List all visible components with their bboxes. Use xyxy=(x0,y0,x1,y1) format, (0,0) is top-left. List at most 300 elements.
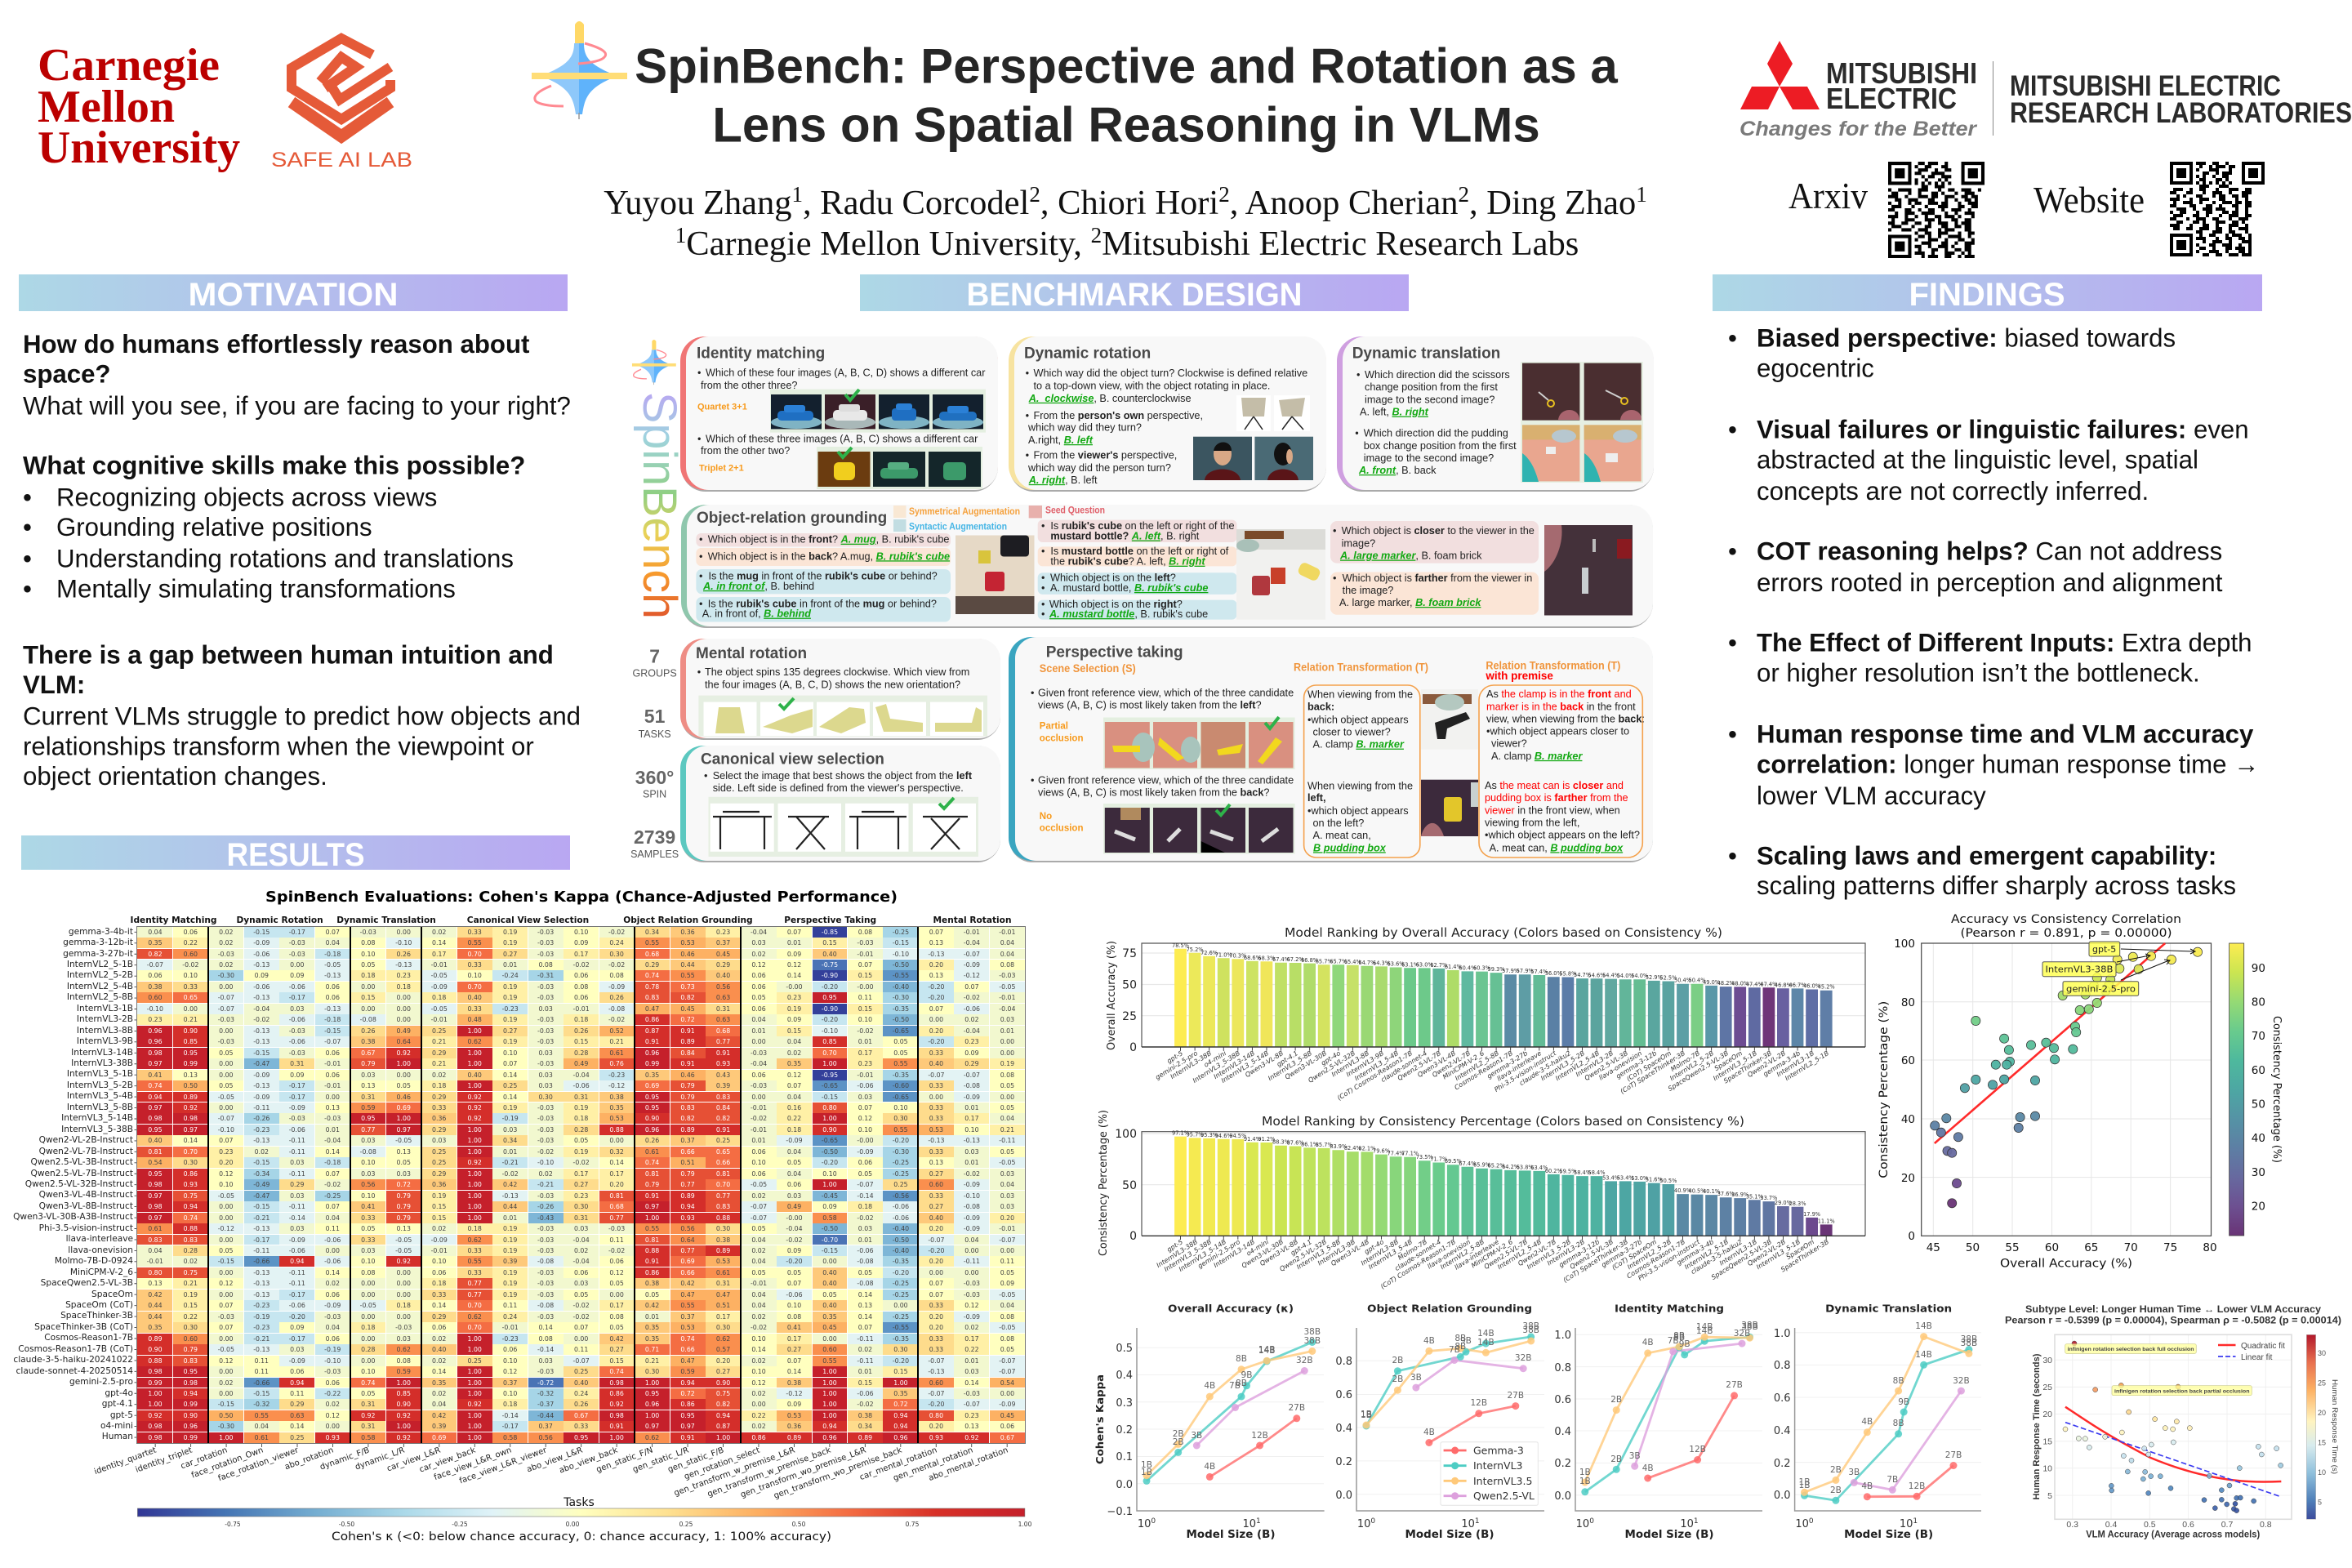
bar chart: model ranking by overall accuracy: Qwen3-VL-30B xyxy=(1284,1049,1328,1081)
panel: perspective taking: occlusion xyxy=(1040,823,1083,833)
heatmap: Cohen's kappa by model and task: 0.07 xyxy=(219,1137,234,1144)
heatmap: Cohen's kappa by model and task: 0.14 xyxy=(432,939,446,947)
heatmap: Cohen's kappa by model and task: -0.02 xyxy=(253,1016,270,1023)
heatmap: Cohen's kappa by model and task: -0.30 xyxy=(218,972,234,979)
authors and affiliations: 1 xyxy=(675,223,686,247)
heatmap: Cohen's kappa by model and task: 0.01 xyxy=(964,1159,979,1166)
heatmap: Cohen's kappa by model and task: 0.59 xyxy=(680,1368,695,1375)
heatmap: Cohen's kappa by model and task: 0.13 xyxy=(964,1423,979,1430)
heatmap: Cohen's kappa by model and task: 0.00 xyxy=(1000,1093,1014,1101)
heatmap: Cohen's kappa by model and task: 1.00 xyxy=(467,1390,482,1397)
heatmap: Cohen's kappa by model and task: -0.06 xyxy=(289,1038,305,1045)
panel: object-relation grounding: A. large marker, B. foam brick xyxy=(1339,550,1482,562)
vertical SpinBench wordmark: SpinBench xyxy=(633,392,686,619)
heatmap row labels: llava-onevision xyxy=(68,1245,133,1255)
bar chart: model ranking by overall accuracy: InternVL2_5-1B xyxy=(1784,1049,1830,1082)
panel: dynamic rotation: A.right, B. left xyxy=(1028,434,1094,446)
annotations: hardest subtypes: infinigen rotation selection back partial occlusion xyxy=(2114,1388,2249,1394)
bar chart: model ranking by overall accuracy: 49.0% xyxy=(1703,979,1720,986)
heatmap: Cohen's kappa by model and task: -0.02 xyxy=(608,929,625,936)
heatmap row labels: Human xyxy=(102,1432,133,1441)
heatmap: Cohen's kappa by model and task: -0.03 xyxy=(537,1038,554,1045)
heatmap: Cohen's kappa by model and task: -0.65 xyxy=(893,1093,909,1101)
bar chart: model ranking by consistency percentage: 94.5% xyxy=(1229,1133,1246,1139)
panel: object-relation grounding: A. large marker, B. foam brick xyxy=(1339,597,1481,608)
line chart: object relation grounding: 38B xyxy=(1522,1321,1539,1331)
heatmap: Cohen's kappa by model and task: 0.20 xyxy=(929,1258,943,1265)
heatmap: Cohen's kappa by model and task: -0.35 xyxy=(893,1071,909,1079)
heatmap: Cohen's kappa by model and task: -0.50 xyxy=(822,1148,838,1156)
heatmap: Cohen's kappa by model and task: -0.05 xyxy=(395,1137,412,1144)
heatmap: Cohen's kappa by model and task: 0.11 xyxy=(503,1302,517,1309)
heatmap: Cohen's kappa by model and task: 0.47 xyxy=(680,1291,695,1298)
heatmap: Cohen's kappa by model and task: -0.11 xyxy=(964,1258,980,1265)
heatmap: Cohen's kappa by model and task: 0.07 xyxy=(787,1082,801,1089)
authors and affiliations: 1 xyxy=(1636,182,1647,207)
line chart: dynamic translation: 38B xyxy=(1961,1339,1977,1348)
bar chart: model ranking by overall accuracy: gpt-5 xyxy=(1165,1049,1184,1065)
heatmap: Cohen's kappa by model and task: 0.95 xyxy=(680,1412,695,1419)
heatmap: Cohen's kappa by model and task: -0.00 xyxy=(857,1137,874,1144)
callout box: relation transformation with premise: marker is in the back in the front xyxy=(1486,701,1636,712)
heatmap: Cohen's kappa by model and task: -0.17 xyxy=(253,1236,270,1243)
heatmap colorbar: -0.25 xyxy=(452,1521,468,1528)
heatmap: Cohen's kappa by model and task: 0.22 xyxy=(787,1115,801,1122)
heatmap: Cohen's kappa by model and task: 0.00 xyxy=(751,1038,766,1045)
heatmap: Cohen's kappa by model and task: -0.32 xyxy=(253,1401,270,1408)
heatmap: Cohen's kappa by model and task: 0.03 xyxy=(964,1368,979,1375)
bar chart: model ranking by consistency percentage: InternVL3_5-4B xyxy=(1367,1238,1414,1271)
heatmap: Cohen's kappa by model and task: -0.20 xyxy=(928,1038,945,1045)
heatmap: Cohen's kappa by model and task: 0.24 xyxy=(609,939,624,947)
panel: dynamic translation xyxy=(1337,336,1654,492)
heatmap: Cohen's kappa by model and task: 0.10 xyxy=(787,1302,801,1309)
heatmap: Cohen's kappa by model and task: -0.09 xyxy=(857,1148,874,1156)
heatmap: Cohen's kappa by model and task: 0.96 xyxy=(184,1423,198,1430)
heatmap: Cohen's kappa by model and task: 0.10 xyxy=(467,972,482,979)
text block: motivation: relationships transform when the viewpoint or xyxy=(23,732,534,761)
heatmap: Cohen's kappa by model and task: 0.92 xyxy=(467,1401,482,1408)
bar chart: model ranking by overall accuracy: 68.6% xyxy=(1244,955,1261,961)
callout box: relation transformation: •which object appears xyxy=(1307,714,1409,725)
heatmap: Cohen's kappa by model and task: 0.02 xyxy=(432,1335,446,1343)
panel: object-relation grounding: • xyxy=(699,534,702,546)
panel: dynamic rotation: • xyxy=(1026,368,1029,379)
heatmap row labels: InternVL3-38B xyxy=(71,1058,133,1068)
colorbar: response time: 5 xyxy=(2318,1498,2322,1506)
heatmap: Cohen's kappa by model and task: 0.10 xyxy=(503,1390,517,1397)
heatmap: Cohen's kappa by model and task: -0.05 xyxy=(218,1093,234,1101)
legend: augmentation types: Syntactic Augmentation xyxy=(909,523,1007,532)
heatmap task labels: abo_rotation xyxy=(283,1446,335,1472)
heatmap: Cohen's kappa by model and task: 0.06 xyxy=(609,1258,624,1265)
heatmap: Cohen's kappa by model and task: 0.10 xyxy=(893,1104,908,1111)
scatter plot: accuracy vs consistency: 0 xyxy=(1908,1230,1915,1243)
heatmap: Cohen's kappa by model and task: -0.17 xyxy=(289,1093,305,1101)
heatmap: Cohen's kappa by model and task: 0.89 xyxy=(680,1038,695,1045)
panel: identity matching: Triplet 2+1 xyxy=(699,463,744,473)
colorbar: consistency: 90 xyxy=(2252,962,2265,975)
line chart: overall accuracy: 4B xyxy=(1204,1381,1215,1391)
heatmap: Cohen's kappa by model and task: 1.00 xyxy=(467,1027,482,1035)
heatmap: Cohen's kappa by model and task: 0.98 xyxy=(148,1115,163,1122)
heatmap: Cohen's kappa by model and task: 0.01 xyxy=(858,1236,872,1243)
panel: perspective taking: • xyxy=(1031,687,1034,698)
icon: check mark xyxy=(779,698,794,709)
heatmap: Cohen's kappa by model and task: 0.65 xyxy=(184,994,198,1001)
line chart: dynamic translation: 0.0 xyxy=(1774,1490,1791,1502)
callout box: relation transformation: closer to viewer? xyxy=(1313,726,1391,737)
heatmap row labels: InternVL3_5-14B xyxy=(61,1113,133,1123)
bar chart: model ranking by overall accuracy: 70.3% xyxy=(1229,952,1246,959)
heatmap: Cohen's kappa by model and task: 0.95 xyxy=(645,1390,659,1397)
heatmap: Cohen's kappa by model and task: 0.04 xyxy=(326,1324,340,1331)
heatmap: Cohen's kappa by model and task: 0.07 xyxy=(574,1324,588,1331)
heatmap: Cohen's kappa by model and task: 0.55 xyxy=(680,972,695,979)
heatmap: Cohen's kappa by model and task: -0.14 xyxy=(289,1214,305,1222)
bar chart: model ranking by consistency percentage: (CoT) SpaceOm xyxy=(1610,1238,1658,1272)
line chart: dynamic translation: 14B xyxy=(1915,1350,1932,1360)
heatmap: Cohen's kappa by model and task: 0.19 xyxy=(503,1269,517,1276)
image strip: quartet cars xyxy=(770,390,986,433)
heatmap: Cohen's kappa by model and task: 0.10 xyxy=(574,929,588,936)
heatmap: Cohen's kappa by model and task: -0.04 xyxy=(751,1060,767,1067)
colorbar: consistency: 80 xyxy=(2252,996,2265,1009)
colorbar: response time: 10 xyxy=(2318,1468,2326,1477)
heatmap: Cohen's kappa by model and task: 0.95 xyxy=(822,994,837,1001)
heatmap: Cohen's kappa by model and task: 0.83 xyxy=(716,1093,730,1101)
heatmap: Cohen's kappa by model and task: 0.31 xyxy=(361,1093,375,1101)
heatmap: Cohen's kappa by model and task: 0.08 xyxy=(858,929,872,936)
heatmap: Cohen's kappa by model and task: -0.05 xyxy=(360,1302,376,1309)
text block: motivation: Mentally simulating transformations xyxy=(56,575,456,603)
heatmap: Cohen's kappa by model and task: 1.00 xyxy=(148,1401,163,1408)
heatmap: Cohen's kappa by model and task: 0.10 xyxy=(503,1357,517,1365)
heatmap: Cohen's kappa by model and task: 0.33 xyxy=(467,961,482,969)
heatmap: Cohen's kappa by model and task: 0.58 xyxy=(503,1434,517,1441)
heatmap: Cohen's kappa by model and task: 0.68 xyxy=(609,1203,624,1210)
bar chart: model ranking by overall accuracy: 57.4% xyxy=(1530,969,1548,975)
bar chart: model ranking by overall accuracy: 54.4% xyxy=(1602,972,1619,978)
icon: small spinning top xyxy=(632,340,676,385)
heatmap: Cohen's kappa by model and task: 0.96 xyxy=(148,1038,163,1045)
heatmap: Cohen's kappa by model and task: 0.62 xyxy=(467,1313,482,1321)
line chart: identity matching: 10 xyxy=(1576,1518,1589,1530)
heatmap row labels: Qwen2-VL-7B-Instruct xyxy=(39,1147,133,1156)
heatmap: Cohen's kappa by model and task: -0.06 xyxy=(289,983,305,991)
bar chart: model ranking by consistency percentage: Qwen2.5-VL-3B xyxy=(1569,1238,1615,1271)
heatmap: Cohen's kappa by model and task: 0.96 xyxy=(645,1126,659,1134)
heatmap: Cohen's kappa by model and task: 0.63 xyxy=(290,1412,304,1419)
heatmap: Cohen's kappa by model and task: -0.17 xyxy=(289,1082,305,1089)
heatmap: Cohen's kappa by model and task: 1.00 xyxy=(467,1082,482,1089)
heatmap: Cohen's kappa by model and task: 0.17 xyxy=(609,1302,624,1309)
bar chart: model ranking by consistency percentage: 83.9% xyxy=(1330,1143,1347,1150)
heatmap: Cohen's kappa by model and task: -0.03 xyxy=(537,1027,554,1035)
heatmap: Cohen's kappa by model and task: -0.21 xyxy=(253,1335,270,1343)
heatmap: Cohen's kappa by model and task: -0.13 xyxy=(253,1291,270,1298)
heatmap: Cohen's kappa by model and task: 0.30 xyxy=(184,1324,198,1331)
heatmap: Cohen's kappa by model and task: 0.55 xyxy=(467,1258,482,1265)
heatmap: Cohen's kappa by model and task: 0.85 xyxy=(184,1038,198,1045)
heatmap: Cohen's kappa by model and task: 0.94 xyxy=(148,1093,163,1101)
heatmap: Cohen's kappa by model and task: 0.00 xyxy=(219,1269,234,1276)
heatmap: Cohen's kappa by model and task: 0.25 xyxy=(893,1181,908,1188)
heatmap: Cohen's kappa by model and task: 0.20 xyxy=(716,1357,730,1365)
heatmap row labels: InternVL3_5-2B xyxy=(67,1080,133,1090)
heatmap: Cohen's kappa by model and task: 0.83 xyxy=(184,1236,198,1243)
heatmap: Cohen's kappa by model and task: 0.70 xyxy=(467,1324,482,1331)
heatmap: Cohen's kappa by model and task: 0.15 xyxy=(787,1027,801,1035)
callout box: relation transformation with premise: As the meat can is closer and xyxy=(1485,780,1624,791)
heatmap: Cohen's kappa by model and task: 0.74 xyxy=(680,1335,695,1343)
heatmap: Cohen's kappa by model and task: -0.03 xyxy=(537,1225,554,1232)
logo: Mitsubishi Electric: ELECTRIC xyxy=(1826,82,1957,115)
line chart: dynamic translation: 10 xyxy=(1795,1518,1809,1530)
heatmap: Cohen's kappa by model and task: 0.85 xyxy=(397,1390,411,1397)
heatmap: Cohen's kappa by model and task: 0.98 xyxy=(148,1368,163,1375)
heatmap: Cohen's kappa by model and task: 0.42 xyxy=(503,1181,517,1188)
annotations: hardest subtypes xyxy=(2065,1344,2252,1396)
heatmap: Cohen's kappa by model and task: 0.27 xyxy=(609,1346,624,1353)
heatmap: Cohen's kappa by model and task: 1.00 xyxy=(645,1379,659,1387)
panel: dynamic translation: image to the second image? xyxy=(1365,394,1494,405)
line chart: identity matching: 1 xyxy=(1694,1517,1699,1526)
heatmap: Cohen's kappa by model and task: 0.33 xyxy=(467,1005,482,1013)
heatmap: Cohen's kappa by model and task: 0.00 xyxy=(822,1335,837,1343)
line chart: identity matching: Identity Matching xyxy=(1615,1303,1724,1315)
bar chart: model ranking by consistency percentage: gpt-4o xyxy=(1363,1238,1385,1256)
heatmap: Cohen's kappa by model and task: 0.00 xyxy=(964,1269,979,1276)
heatmap: Cohen's kappa by model and task: -0.07 xyxy=(857,1181,874,1188)
heatmap: Cohen's kappa by model and task: -0.09 xyxy=(289,1357,305,1365)
heatmap: Cohen's kappa by model and task: -0.08 xyxy=(964,1082,980,1089)
heatmap: Cohen's kappa by model and task: 0.79 xyxy=(680,1093,695,1101)
bar chart: model ranking by overall accuracy: Qwen2.5-VL-3B xyxy=(1584,1049,1629,1082)
line chart: object relation grounding: 12B xyxy=(1471,1398,1487,1408)
heatmap row labels: gemma-3-27b-it xyxy=(63,949,133,959)
heatmap: Cohen's kappa by model and task: 0.94 xyxy=(290,1258,304,1265)
bar chart: model ranking by overall accuracy: InternVL2_5-8B xyxy=(1454,1049,1500,1082)
heatmap: Cohen's kappa by model and task: 0.02 xyxy=(432,1071,446,1079)
heatmap: Cohen's kappa by model and task: 0.38 xyxy=(716,1236,730,1243)
panel: dynamic translation: Which direction did the scissors xyxy=(1365,369,1510,381)
heatmap row labels: SpaceOm (CoT) xyxy=(65,1300,133,1310)
bar chart: model ranking by overall accuracy: 60.4% xyxy=(1459,965,1476,972)
colorbar: consistency: 60 xyxy=(2252,1064,2265,1077)
bar chart: model ranking by consistency percentage: 63.4% xyxy=(1530,1165,1548,1171)
heatmap: Cohen's kappa by model and task: 0.83 xyxy=(184,1357,198,1365)
heatmap: Cohen's kappa by model and task: 0.95 xyxy=(645,1093,659,1101)
heatmap row labels: Qwen2.5-VL-32B-Instruct xyxy=(25,1179,133,1189)
scatter plot: human response time vs VLM accuracy: 0.6 xyxy=(2182,1520,2194,1530)
title: SpinBench: Perspective and Rotation as a xyxy=(635,39,1618,93)
panel: canonical view selection: side. Left side is defined from the viewer's perspective. xyxy=(713,782,964,794)
heatmap: Cohen's kappa by model and task: 0.92 xyxy=(148,1412,163,1419)
heatmap: Cohen's kappa by model and task: 0.17 xyxy=(432,951,446,958)
text block: motivation: • xyxy=(23,575,32,603)
line chart: identity matching: 8B xyxy=(1673,1331,1685,1341)
heatmap: Cohen's kappa by model and task: -0.01 xyxy=(431,1247,448,1254)
heatmap: Cohen's kappa by model and task: 0.86 xyxy=(184,1170,198,1178)
heatmap: Cohen's kappa by model and task: 0.67 xyxy=(361,1049,375,1057)
scatter plot: accuracy vs consistency: 70 xyxy=(2124,1241,2138,1254)
heatmap: Cohen's kappa by model and task: -0.02 xyxy=(502,1170,519,1178)
heatmap: Cohen's kappa by model and task: 0.08 xyxy=(574,983,588,991)
heatmap: Cohen's kappa by model and task: 0.98 xyxy=(148,1203,163,1210)
annotation labels xyxy=(2042,942,2139,996)
bar chart: model ranking by overall accuracy: 0 xyxy=(1129,1041,1137,1054)
line chart: identity matching: 2B xyxy=(1610,1454,1622,1464)
heatmap: Cohen's kappa by model and task: -0.09 xyxy=(964,1181,980,1188)
heatmap: Cohen's kappa by model and task: 0.08 xyxy=(538,961,553,969)
icon: check mark xyxy=(1216,804,1230,815)
heatmap task labels: abo_mental_rotation xyxy=(928,1446,1009,1483)
line chart: overall accuracy: 14B xyxy=(1258,1345,1275,1355)
heatmap: Cohen's kappa by model and task: 0.14 xyxy=(432,1302,446,1309)
text block: findings: Human response time and VLM accuracy xyxy=(1757,720,2254,748)
image strip: sofa views xyxy=(698,696,987,737)
heatmap colorbar: -0.75 xyxy=(225,1521,241,1528)
heatmap: Cohen's kappa by model and task: 0.04 xyxy=(751,1258,766,1265)
line chart: object relation grounding: 1B xyxy=(1361,1410,1372,1419)
line chart: dynamic translation: 2B xyxy=(1830,1486,1842,1495)
heatmap: Cohen's kappa by model and task: 0.81 xyxy=(645,1236,659,1243)
bar chart: model ranking by consistency percentage: MiniCPM-V-2_6 xyxy=(1470,1238,1514,1270)
heatmap: Cohen's kappa by model and task: 0.58 xyxy=(361,1434,375,1441)
scatter plot: human response time vs VLM accuracy: 0.8 xyxy=(2260,1520,2272,1530)
heatmap: Cohen's kappa by model and task: 0.10 xyxy=(219,1181,234,1188)
image strip: triplet cars xyxy=(817,447,982,489)
heatmap: Cohen's kappa by model and task: 0.04 xyxy=(751,1291,766,1298)
heatmap: Cohen's kappa by model and task: 0.81 xyxy=(645,1170,659,1178)
heatmap row labels: SpaceThinker-3B (CoT) xyxy=(34,1322,133,1332)
heatmap: Cohen's kappa by model and task: -0.47 xyxy=(253,1060,270,1067)
heatmap: Cohen's kappa by model and task: -0.03 xyxy=(289,1049,305,1057)
heatmap: Cohen's kappa by model and task: 0.14 xyxy=(787,972,801,979)
heatmap: Cohen's kappa by model and task: -0.15 xyxy=(822,1247,838,1254)
panel: object-relation grounding: Which object is on the right? xyxy=(1049,599,1183,610)
heatmap: Cohen's kappa by model and task: 0.40 xyxy=(467,994,482,1001)
heatmap: Cohen's kappa by model and task: 0.21 xyxy=(432,1038,446,1045)
heatmap: Cohen's kappa by model and task: 0.98 xyxy=(184,1115,198,1122)
heatmap: Cohen's kappa by model and task: -0.06 xyxy=(289,1247,305,1254)
heatmap: Cohen's kappa by model and task: -0.18 xyxy=(324,1159,341,1166)
heatmap: Cohen's kappa by model and task: 0.29 xyxy=(432,1049,446,1057)
benchmark statistics: 51 xyxy=(644,706,666,727)
scatter plot: accuracy vs consistency: (Pearson r = 0.891, p = 0.00000) xyxy=(1960,927,2172,940)
heatmap: Cohen's kappa by model and task: 0.40 xyxy=(574,1379,588,1387)
heatmap: Cohen's kappa by model and task: 0.92 xyxy=(397,1049,411,1057)
heatmap: Cohen's kappa by model and task: 0.33 xyxy=(467,1269,482,1276)
legend: model families: Gemma-3 xyxy=(1473,1444,1524,1457)
bar chart: model ranking by consistency percentage: 97.1% xyxy=(1172,1130,1189,1137)
heatmap: Cohen's kappa by model and task: -0.18 xyxy=(324,1016,341,1023)
colorbar: response time xyxy=(2306,1334,2339,1519)
heatmap: Cohen's kappa by model and task: 0.49 xyxy=(574,1060,588,1067)
heatmap: Cohen's kappa by model and task: 0.83 xyxy=(148,1236,163,1243)
heatmap task labels: gen_transform_wo_premise_L&R xyxy=(739,1446,867,1499)
heatmap: Cohen's kappa by model and task: -0.01 xyxy=(573,1005,590,1013)
heatmap task labels: face_rotation_Own xyxy=(190,1446,265,1481)
heatmap: Cohen's kappa by model and task: -0.05 xyxy=(395,1247,412,1254)
heatmap: Cohen's kappa by model and task: 0.05 xyxy=(1000,1346,1014,1353)
heatmap: Cohen's kappa by model and task: 0.77 xyxy=(467,1280,482,1287)
bar chart: model ranking by overall accuracy xyxy=(1106,925,1865,1102)
heatmap: Cohen's kappa by model and task: 0.69 xyxy=(397,1104,411,1111)
line chart: dynamic translation: 8B xyxy=(1893,1376,1904,1386)
bar chart: model ranking by consistency percentage: 33.7% xyxy=(1760,1195,1777,1201)
heatmap: Cohen's kappa by model and task: 0.25 xyxy=(716,1137,730,1144)
line chart: object relation grounding: 2B xyxy=(1392,1374,1403,1384)
bar chart: model ranking by consistency percentage: Cosmos-Reason1-7B xyxy=(1625,1238,1686,1280)
panel: object-relation grounding: mustard bottle? A. left, B. right xyxy=(1050,531,1200,542)
callout box: relation transformation with premise: As the clamp is in the front and xyxy=(1486,688,1632,700)
heatmap: Cohen's kappa by model and task: 0.10 xyxy=(858,1126,872,1134)
heatmap: Cohen's kappa by model and task: -0.50 xyxy=(822,1225,838,1232)
heatmap: Cohen's kappa by model and task: 0.61 xyxy=(609,1049,624,1057)
panel: object-relation grounding: Object-relation grounding xyxy=(697,510,887,527)
heatmap: Cohen's kappa by model and task: 1.00 xyxy=(467,1049,482,1057)
heatmap: Cohen's kappa by model and task: 0.28 xyxy=(574,1049,588,1057)
heatmap: Cohen's kappa by model and task: 0.01 xyxy=(503,1148,517,1156)
heatmap: Cohen's kappa by model and task: -0.12 xyxy=(218,1225,234,1232)
heatmap: Cohen's kappa by model and task: 1.00 xyxy=(822,1379,837,1387)
heatmap: Cohen's kappa by model and task: -0.01 xyxy=(431,1016,448,1023)
heatmap: Cohen's kappa by model and task: 0.08 xyxy=(609,972,624,979)
heatmap: Cohen's kappa by model and task: 0.31 xyxy=(574,1093,588,1101)
heatmap: Cohen's kappa by model and task: 0.39 xyxy=(716,1082,730,1089)
bar chart: model ranking by consistency percentage: InternVL3_5-2B xyxy=(1526,1238,1572,1271)
heatmap: Cohen's kappa by model and task: 0.02 xyxy=(964,1324,979,1331)
heatmap: Cohen's kappa by model and task: 0.07 xyxy=(326,1170,340,1178)
heatmap: Cohen's kappa by model and task: 0.03 xyxy=(574,1225,588,1232)
panel: perspective taking: Scene Selection (S) xyxy=(1040,662,1136,675)
heatmap: Cohen's kappa by model and task: -0.03 xyxy=(537,1247,554,1254)
heatmap: Cohen's kappa by model and task: 0.91 xyxy=(680,1027,695,1035)
heatmap: Cohen's kappa by model and task: 0.40 xyxy=(716,972,730,979)
images: person views xyxy=(1193,437,1313,480)
heatmap: Cohen's kappa by model and task: 0.11 xyxy=(1000,1258,1014,1265)
heatmap: Cohen's kappa by model and task: 0.02 xyxy=(219,939,234,947)
bar chart: model ranking by consistency percentage: 91.4% xyxy=(1244,1136,1261,1143)
heatmap: Cohen's kappa by model and task: -0.02 xyxy=(573,1159,590,1166)
heatmap: Cohen's kappa by model and task: 0.55 xyxy=(645,939,659,947)
bar chart: model ranking by overall accuracy: llava-onevision xyxy=(1597,1049,1643,1082)
line chart: object relation grounding: Model Size (B) xyxy=(1405,1529,1494,1541)
bar chart: model ranking by overall accuracy: 50 xyxy=(1122,978,1137,991)
bar chart: model ranking by overall accuracy: 65.7% xyxy=(1316,959,1333,965)
line chart: overall accuracy: 1 xyxy=(1256,1517,1261,1526)
heatmap: Cohen's kappa by model and task: 0.09 xyxy=(1000,1280,1014,1287)
heatmap: Cohen's kappa by model and task: 0.72 xyxy=(680,1016,695,1023)
heatmap: Cohen's kappa by model and task: 0.67 xyxy=(1000,1434,1014,1441)
colorbar: consistency: 50 xyxy=(2252,1098,2265,1111)
heatmap: Cohen's kappa by model and task: 0.47 xyxy=(645,1005,659,1013)
heatmap: Cohen's kappa by model and task: 0.34 xyxy=(645,929,659,936)
heatmap task labels: gen_static_F/B xyxy=(666,1446,725,1475)
heatmap: Cohen's kappa by model and task: 0.14 xyxy=(326,1148,340,1156)
heatmap: Cohen's kappa by model and task: -0.03 xyxy=(537,994,554,1001)
heatmap: Cohen's kappa by model and task: 0.72 xyxy=(893,1401,908,1408)
callout box: relation transformation with premise: pudding box is farther from the xyxy=(1485,792,1628,804)
heatmap: Cohen's kappa by model and task: -0.17 xyxy=(289,1291,305,1298)
bar chart: model ranking by overall accuracy: Qwen3-VL-4B xyxy=(1416,1049,1457,1079)
heatmap: Cohen's kappa by model and task: 0.06 xyxy=(290,1368,304,1375)
heatmap: Cohen's kappa by model and task: -0.06 xyxy=(289,1126,305,1134)
heatmap task labels: car_mental_rotation xyxy=(858,1446,938,1482)
heatmap: Cohen's kappa by model and task: 0.00 xyxy=(574,1335,588,1343)
